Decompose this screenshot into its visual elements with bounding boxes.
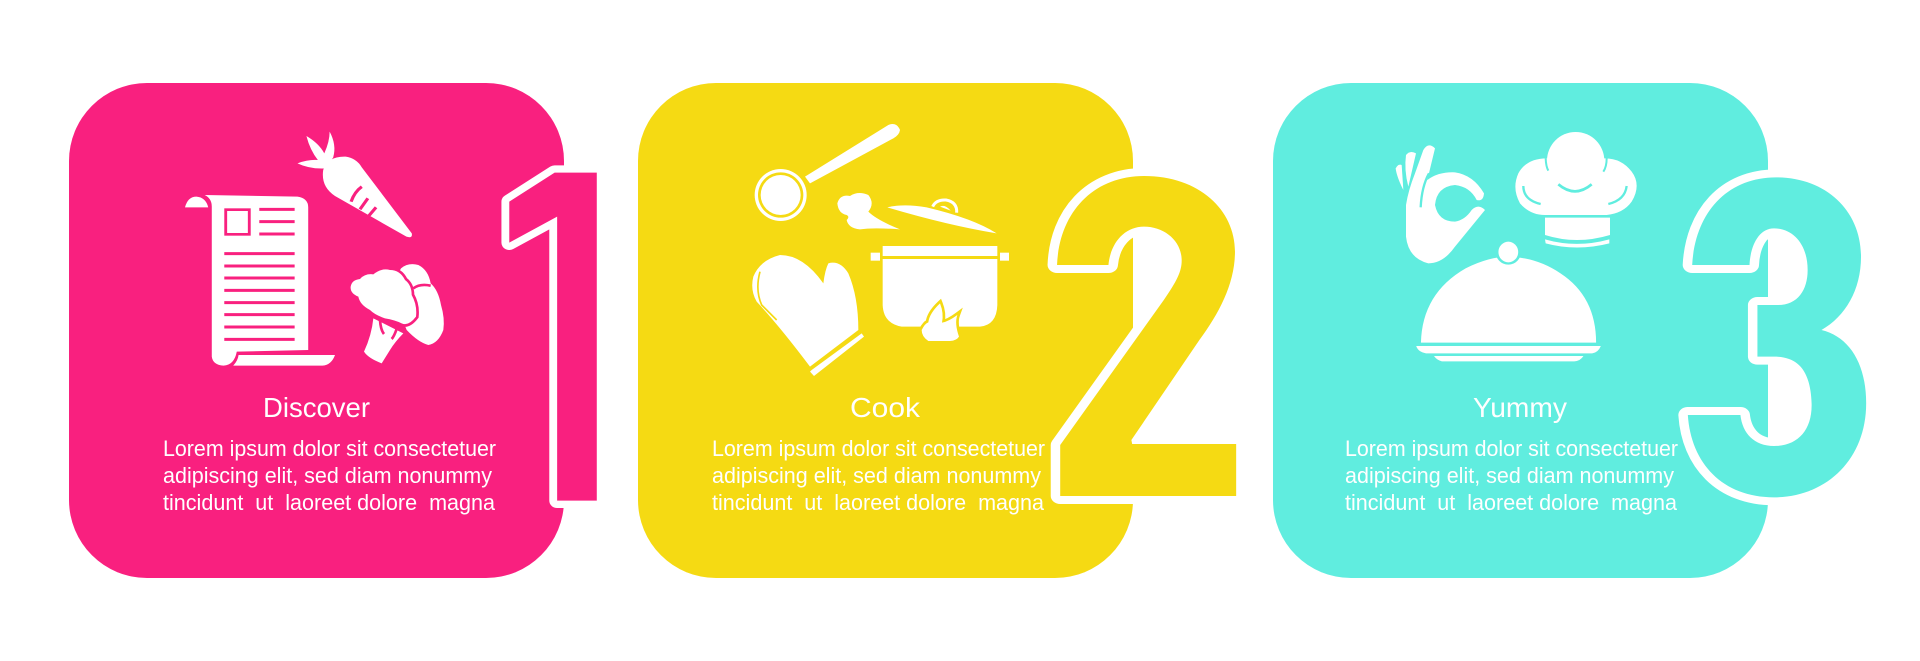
panel: discover [69,83,597,578]
text block: yummy description: tincidunt ut laoreet dolore magna [1345,490,1678,515]
panel: cook [638,83,1236,578]
heading: Cook: Cook [850,392,921,423]
text block: discover description: tincidunt ut laoreet dolore magna [163,490,496,515]
icon: carrot [297,132,412,237]
icon: chef hat [1515,132,1637,247]
text block: discover description: Lorem ipsum dolor sit consectetuer [163,436,496,461]
panel background: yellow [638,83,1133,578]
text block: discover description [163,436,496,515]
text block: cook description [712,436,1045,515]
panel background: teal [1273,83,1768,578]
number 2 [1057,176,1236,496]
text block: cook description: tincidunt ut laoreet dolore magna [712,490,1045,515]
heading: Yummy: Yummy [1473,392,1567,423]
text block: yummy description [1345,436,1678,515]
text block: cook description: adipiscing elit, sed diam nonummy [712,463,1041,488]
panel: yummy [1273,83,1866,578]
icon: steam puff [837,193,900,229]
panel background: pink [69,83,564,578]
icon: broccoli [351,264,444,363]
number 3 [1688,177,1866,497]
text block: discover description: adipiscing elit, sed diam nonummy [163,463,492,488]
icon: OK hand [1396,145,1485,263]
number 1 [509,173,597,501]
text block: cook description: Lorem ipsum dolor sit consectetuer [712,436,1045,461]
icon: oven mitt [752,255,864,376]
icon: serving cloche [1416,242,1601,361]
text block: yummy description: adipiscing elit, sed diam nonummy [1345,463,1674,488]
icon: cooking pot with lid and flame [871,200,1009,341]
text block: yummy description: Lorem ipsum dolor sit consectetuer [1345,436,1678,461]
icon: recipe scroll [185,195,335,366]
icon: ladle [755,124,900,221]
heading: Discover: Discover [263,392,370,423]
